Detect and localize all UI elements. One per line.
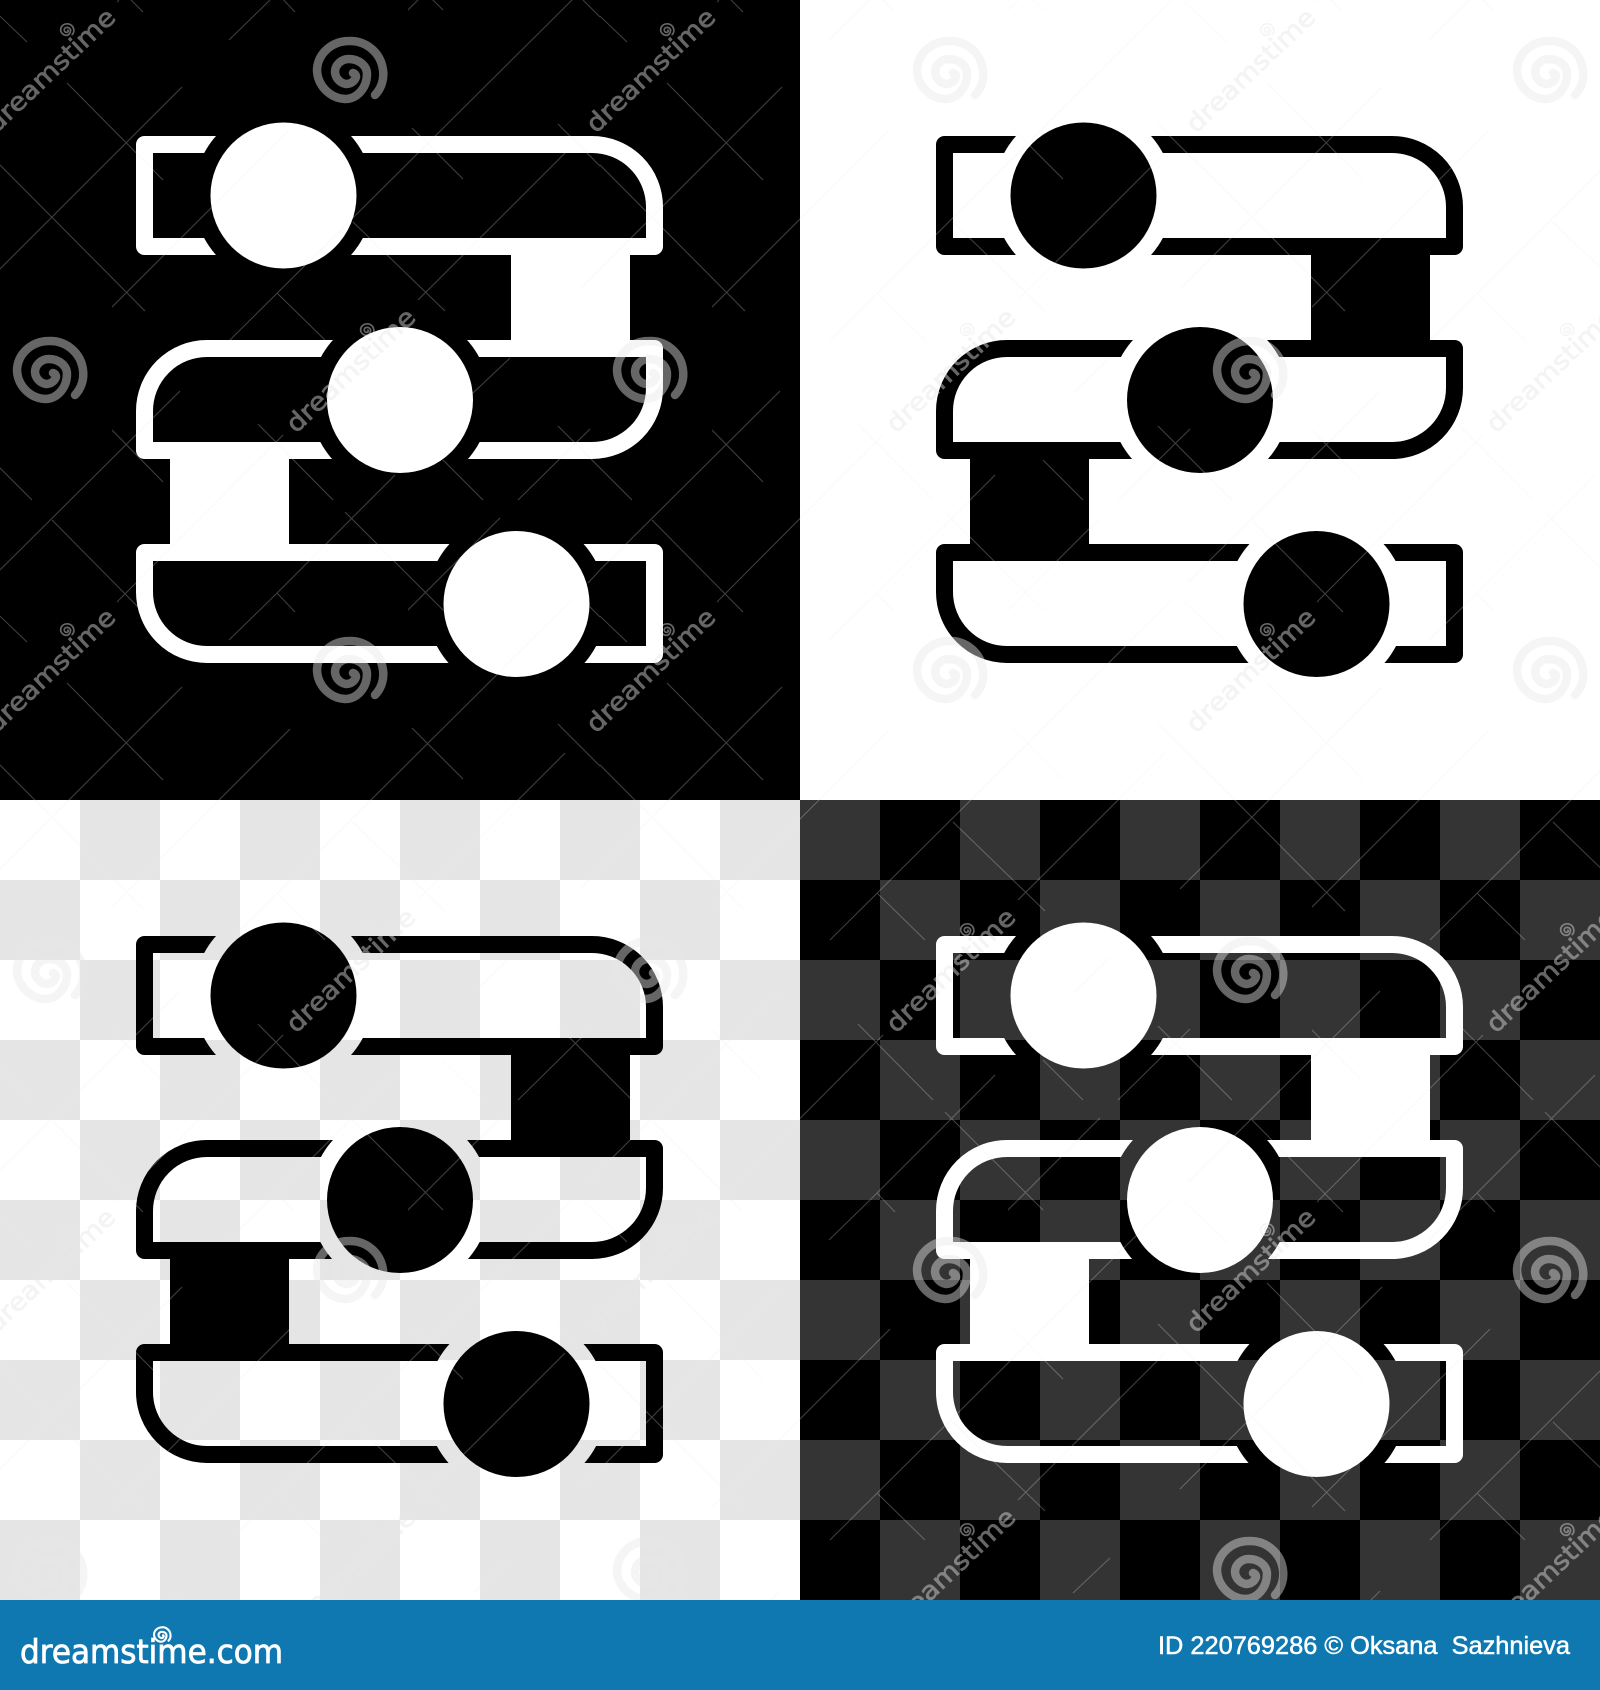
connector blocks bbox=[970, 246, 1430, 553]
slider bands bbox=[144, 944, 654, 1454]
slider bands bbox=[944, 144, 1454, 654]
watermark overlay: dreamstime bbox=[280, 302, 421, 438]
slider knobs bbox=[1010, 122, 1390, 677]
footer logo: dreamstime.com: dreamstime.com bbox=[20, 1632, 283, 1671]
icon: black sliders on light checkerboard bbox=[144, 922, 654, 1477]
footer credit: image ID and author: ID 220769286 © Oksana Sazhnieva bbox=[1158, 1632, 1570, 1660]
footer bar bbox=[0, 1600, 1600, 1690]
watermark overlay: dreamstime bbox=[280, 1502, 421, 1638]
connector blocks bbox=[970, 1046, 1430, 1353]
connector blocks bbox=[170, 246, 630, 553]
watermark overlay: dreamstime bbox=[1180, 2, 1321, 138]
slider bands bbox=[944, 944, 1454, 1454]
slider knobs bbox=[1010, 922, 1390, 1477]
slider knobs bbox=[210, 922, 590, 1477]
panel: black background bbox=[0, 0, 800, 800]
panel: dark transparency checkerboard bbox=[800, 800, 1600, 1600]
watermark overlay: dreamstime bbox=[1180, 1202, 1321, 1338]
watermark overlay: dreamstime bbox=[280, 902, 421, 1038]
icon: white sliders on black bbox=[144, 122, 654, 677]
panel: light transparency checkerboard bbox=[0, 800, 800, 1600]
watermark overlay: dreamstime bbox=[880, 302, 1021, 438]
watermark overlay: dreamstime bbox=[880, 902, 1021, 1038]
icon: white sliders on dark checkerboard bbox=[944, 922, 1454, 1477]
watermark overlay: dreamstime bbox=[1180, 602, 1321, 738]
slider knobs bbox=[210, 122, 590, 677]
icon: black sliders on white bbox=[944, 122, 1454, 677]
watermark overlay: dreamstime bbox=[580, 1202, 721, 1338]
slider bands bbox=[144, 144, 654, 654]
connector blocks bbox=[170, 1046, 630, 1353]
watermark overlay: dreamstime bbox=[580, 602, 721, 738]
watermark overlay: dreamstime bbox=[880, 1502, 1021, 1638]
watermark overlay: dreamstime bbox=[580, 2, 721, 138]
panel: white background bbox=[800, 0, 1600, 800]
